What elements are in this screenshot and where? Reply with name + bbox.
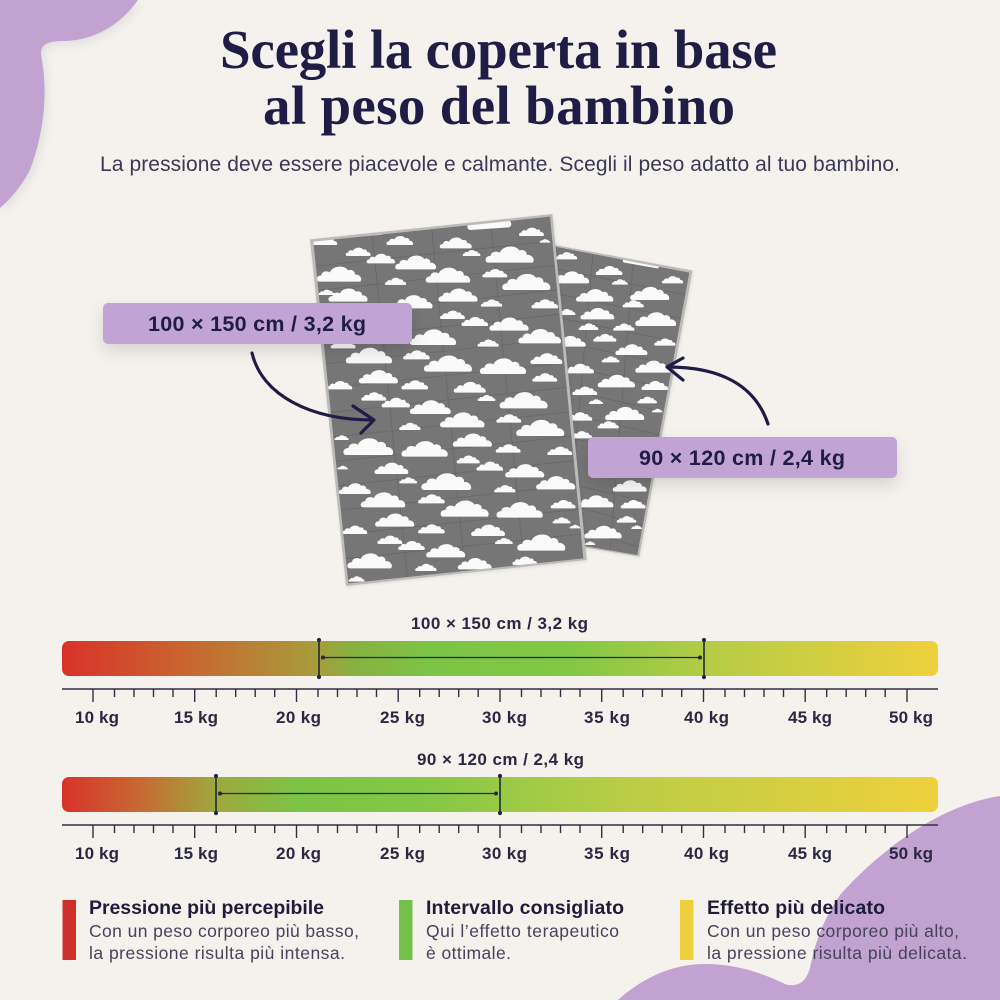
legend: red: la pressione risulta più intensa. [89,943,345,963]
ruler labels: 25 kg [380,708,425,727]
callout: 100 x 150 cm: 100 × 150 cm / 3,2 kg [148,312,366,336]
ruler labels [75,708,933,727]
recommended range bracket [214,774,502,815]
swatch: green [399,900,412,960]
callout: 90 x 120 cm [588,437,897,478]
ruler labels: 30 kg [482,708,527,727]
weight ruler [62,825,938,838]
legend: yellow [680,897,967,963]
legend: yellow: la pressione risulta più delicata. [707,943,967,963]
ruler labels: 15 kg [174,844,218,863]
chart: 90 x 120 cm range [62,750,938,863]
recommended range bracket [317,638,706,679]
weight ruler [62,689,938,702]
legend: green: Qui l’effetto terapeutico [426,921,619,941]
legend: red: Pressione più percepibile [89,897,324,919]
ruler labels: 50 kg [889,708,933,727]
ruler labels: 30 kg [482,844,527,863]
legend: yellow: Effetto più delicato [707,897,885,919]
swatch: yellow [680,900,694,960]
legend: green: Intervallo consigliato [426,897,624,919]
title [220,19,777,136]
decorative blob: top left [0,0,138,208]
ruler labels: 45 kg [788,708,832,727]
ruler labels: 35 kg [584,844,630,863]
big blanket [310,214,587,586]
decorative blob: bottom right [618,796,1000,1000]
ruler labels: 15 kg [174,708,218,727]
ruler labels: 20 kg [276,844,321,863]
chart heading: 100 × 150 cm / 3,2 kg [411,614,588,633]
ruler labels: 45 kg [788,844,832,863]
ruler labels: 10 kg [75,844,119,863]
legend: green: è ottimale. [426,943,511,963]
ruler labels [75,844,933,863]
title: al peso del bambino [263,75,735,136]
gradient bar [62,641,938,676]
image: two weighted blankets with cloud pattern [310,214,693,586]
legend: red [62,897,359,963]
ruler labels: 40 kg [684,708,729,727]
swatch: red [62,900,76,960]
small blanket [552,244,693,557]
ruler labels: 10 kg [75,708,119,727]
legend: red: Con un peso corporeo più basso, [89,921,359,941]
legend: yellow: Con un peso corporeo più alto, [707,921,959,941]
chart heading: 90 × 120 cm / 2,4 kg [417,750,584,769]
chart: 100 x 150 cm range [62,614,938,727]
callout: 100 x 150 cm [103,303,412,344]
title: Scegli la coperta in base [220,19,777,80]
ruler labels: 50 kg [889,844,933,863]
legend: green [399,897,624,963]
arrow: to big blanket [252,353,374,433]
ruler labels: 35 kg [584,708,630,727]
arrow: to small blanket [667,358,768,424]
callout: 90 x 120 cm: 90 × 120 cm / 2,4 kg [639,446,845,470]
subtitle: La pressione deve essere piacevole e calmante. Scegli il peso adatto al tuo bambino. [100,153,900,176]
gradient bar [62,777,938,812]
ruler labels: 20 kg [276,708,321,727]
ruler labels: 40 kg [684,844,729,863]
ruler labels: 25 kg [380,844,425,863]
